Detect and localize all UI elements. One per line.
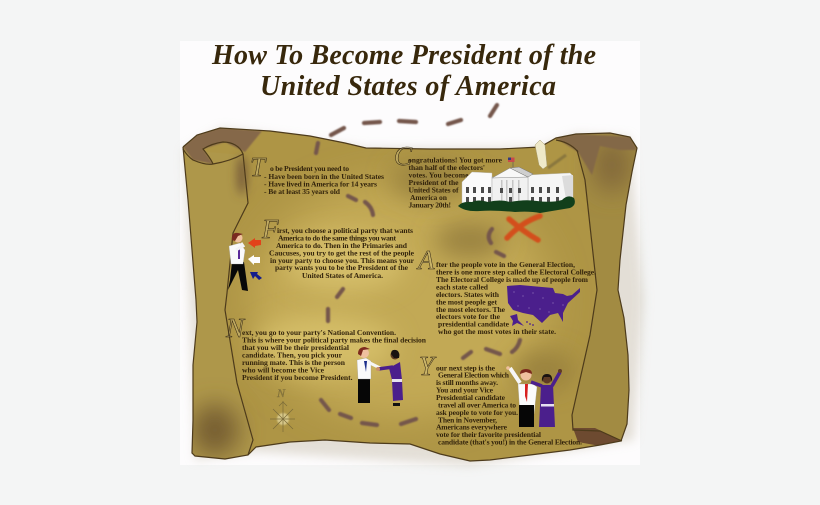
icon: quill	[535, 140, 566, 169]
text: general election: You and your Vice	[436, 386, 494, 394]
text: congratulations: C	[394, 141, 413, 171]
parchment scroll map	[180, 125, 644, 466]
text: congratulations	[394, 141, 503, 210]
text: national convention: running mate. This is the person	[242, 358, 346, 367]
text: general election: Presidential candidate	[436, 393, 506, 402]
text: general election: vote for their favorite presidential	[436, 430, 541, 439]
left scroll roll	[185, 150, 253, 465]
figure: running mates shaking hands	[357, 347, 403, 406]
text: general election: candidate (that's you!) in the General Election.	[438, 438, 582, 446]
text: national convention: This is where your political party makes the final decision	[242, 336, 427, 344]
title: How To Become President of the	[211, 40, 596, 71]
text: national convention: N	[225, 313, 246, 343]
text: electoral college: who got the most votes in their state.	[438, 327, 556, 336]
text: choose a party: United States of America.	[302, 271, 383, 280]
white poster panel	[180, 41, 640, 465]
text: electoral college: the most electors. The	[436, 305, 506, 314]
text: congratulations: January 20th!	[408, 200, 451, 210]
text: congratulations: America on	[410, 193, 448, 202]
infographic canvas	[180, 41, 647, 469]
icon: compass rose	[270, 386, 295, 432]
icon: flag	[508, 158, 514, 167]
text: choose a party: America to do. Then in the Primaries and	[276, 241, 408, 250]
text: choose a party: Caucuses, you try to get the rest of the people	[269, 248, 415, 258]
text: congratulations: than half of the electors'	[408, 163, 485, 172]
text: electoral college: A	[416, 245, 435, 275]
text: choose a party: irst, you choose a political party that wants	[277, 226, 413, 235]
text: general election: our next step is the	[436, 364, 496, 372]
text: eligibility: T	[250, 152, 267, 182]
text: general election: General Election which	[438, 370, 510, 380]
text: electoral college: electors vote for the	[436, 312, 501, 321]
text: general election	[419, 351, 582, 446]
text: choose a party: America to do the same things you want	[278, 234, 396, 242]
text: congratulations: votes. You become	[408, 170, 469, 180]
right scroll roll	[572, 130, 640, 442]
figure: victorious candidates	[506, 366, 562, 427]
hedge	[458, 196, 575, 213]
White House illustration	[458, 167, 575, 213]
dashed treasure trail	[316, 105, 520, 425]
text: eligibility: - Be at least 35 years old	[264, 187, 341, 196]
US map in purple	[507, 285, 580, 326]
text: electoral college: electors. States with	[436, 290, 500, 299]
text: general election: Americans everywhere	[436, 422, 508, 432]
figure: thinking candidate	[228, 233, 248, 291]
text: choose a party: F	[261, 214, 279, 244]
text: general election: travel all over America to	[438, 400, 516, 410]
text: general election: ask people to vote for you.	[436, 408, 518, 417]
text: eligibility	[250, 152, 384, 196]
text: congratulations: President of the	[408, 178, 459, 187]
text: electoral college: there is one more step called the Electoral College.	[436, 268, 596, 276]
text: general election: Then in November,	[438, 416, 497, 424]
title: United States of America	[260, 71, 556, 102]
text: national convention: who will become the Vice	[242, 366, 325, 374]
text: electoral college: the most people get	[436, 298, 497, 306]
text: national convention: that you will be their presidential	[242, 343, 349, 352]
text: eligibility: o be President you need to	[270, 164, 349, 173]
title	[211, 40, 596, 102]
red X marks the spot	[507, 216, 540, 240]
text: electoral college	[416, 245, 596, 336]
text: eligibility: - Have been born in the United States	[264, 172, 384, 181]
arrow: red	[248, 238, 261, 248]
text: general election: Y	[419, 351, 437, 381]
text: congratulations: ongratulations! You got more	[408, 156, 503, 164]
text: electoral college: fter the people vote in the General Election,	[436, 260, 575, 269]
text: electoral college: each state called	[436, 282, 489, 292]
text: choose a party	[261, 214, 415, 280]
arrow: blue	[250, 272, 262, 280]
text: choose a party: in your party to choose you. This means your	[270, 256, 415, 265]
text: congratulations: United States of	[408, 186, 459, 194]
text: general election: is still months away.	[436, 378, 498, 387]
text: electoral college: The Electoral College is made up of people from	[436, 275, 589, 284]
arrow: white	[248, 255, 260, 265]
text: national convention: President if you become President.	[242, 373, 353, 382]
text: electoral college: presidential candidate	[438, 320, 510, 328]
scroll outlines	[183, 128, 637, 461]
text: national convention: candidate. Then, you pick your	[242, 350, 343, 360]
icon: compass rose: N	[276, 386, 286, 400]
text: eligibility: - Have lived in America for 14 years	[264, 180, 377, 188]
text: national convention: ext, you go to your party's National Convention.	[242, 328, 396, 337]
text: national convention	[225, 313, 427, 382]
text: choose a party: party wants you to be the President of the	[275, 263, 409, 272]
